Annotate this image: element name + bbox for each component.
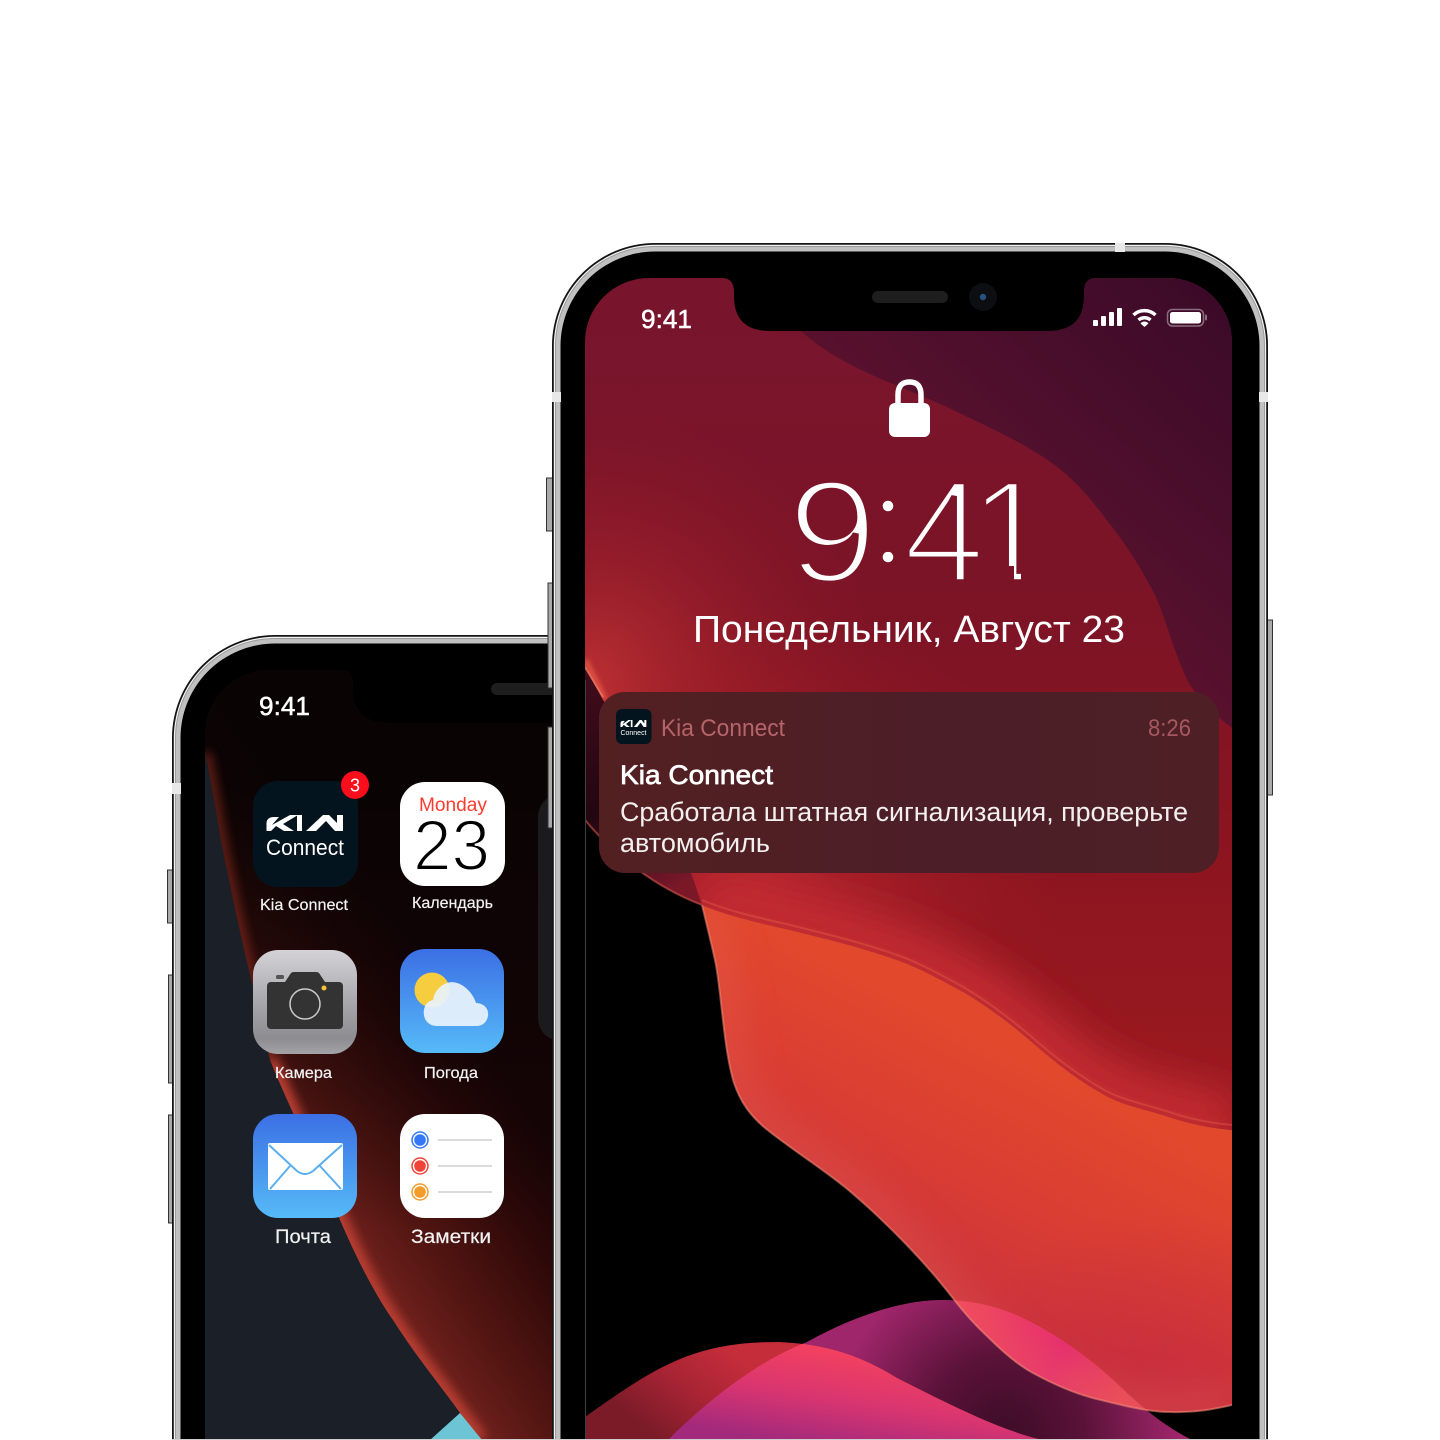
wallpaper: wave edge highlights	[585, 667, 1232, 1412]
cyan wallpaper shape	[430, 1413, 482, 1440]
large clock: :	[871, 454, 905, 592]
left phone: home screen	[167, 635, 552, 1439]
notification time: 8:26	[1148, 715, 1191, 742]
large clock: 1	[970, 450, 1051, 613]
label: weather: Погода	[424, 1065, 478, 1082]
app icon: Kia Connect	[253, 781, 358, 887]
wallpaper: dark upper-right shape	[790, 278, 1232, 728]
notification app name: Kia Connect	[661, 715, 785, 742]
left phone side buttons	[168, 870, 174, 1223]
app icon: calendar	[400, 782, 505, 886]
date: Понедельник, Август 23	[693, 609, 1125, 651]
wallpaper: orange and magenta overlap	[711, 937, 1232, 1412]
notification app icon	[616, 709, 652, 744]
front camera	[969, 283, 997, 311]
right phone: lock screen	[546, 243, 1272, 1440]
icon: padlock	[889, 382, 930, 437]
notification title: Kia Connect	[620, 760, 774, 790]
notification body: Сработала штатная сигнализация, проверьте	[620, 797, 1188, 827]
notification badge	[341, 771, 369, 799]
left phone status time: 9:41	[259, 691, 310, 721]
wallpaper: orange wave	[702, 905, 1232, 1412]
notification card	[599, 692, 1219, 873]
app icon: weather	[400, 949, 504, 1053]
slate wallpaper shape	[205, 753, 480, 1440]
notification body: автомобиль	[620, 828, 770, 858]
left phone wallpaper	[205, 670, 565, 1440]
label: calendar: Календарь	[412, 895, 493, 912]
speaker grille	[872, 291, 948, 303]
app icon: mail	[253, 1114, 357, 1218]
wallpaper: magenta hump	[802, 1300, 1190, 1439]
icon: wifi	[1134, 311, 1156, 327]
notification badge: 3	[350, 776, 360, 796]
large clock: 9	[788, 450, 878, 613]
icon: cellular signal	[1093, 308, 1122, 326]
right phone frame	[552, 243, 1268, 1440]
icon: battery	[1168, 310, 1207, 326]
app icon: calendar: 23	[413, 807, 490, 886]
app icon: calendar: Monday	[419, 795, 487, 816]
large clock	[798, 482, 1021, 581]
label: mail: Почта	[275, 1227, 331, 1248]
label: Kia Connect: Kia Connect	[260, 897, 349, 914]
partial third-column icon	[538, 795, 578, 1040]
left phone speaker	[491, 683, 561, 695]
wallpaper: red and magenta overlap	[669, 1344, 1038, 1439]
wallpaper: red hump	[585, 1342, 1042, 1440]
app icon: notes	[400, 1114, 504, 1218]
status bar time: 9:41	[641, 304, 692, 334]
large clock: 4	[904, 450, 985, 613]
right phone wallpaper	[585, 278, 1232, 1440]
icon: KIA logo	[266, 815, 343, 831]
app icon: camera	[253, 950, 357, 1054]
wallpaper: red upper field	[585, 278, 1232, 1138]
label: camera: Камера	[275, 1065, 332, 1082]
right phone side buttons	[546, 478, 1272, 828]
wallpaper: dark wedge	[585, 667, 702, 905]
Connect wordmark: Connect	[266, 835, 344, 860]
notification app icon: Connect	[620, 730, 647, 737]
left phone frame	[172, 635, 888, 1440]
label: notes: Заметки	[411, 1227, 491, 1248]
